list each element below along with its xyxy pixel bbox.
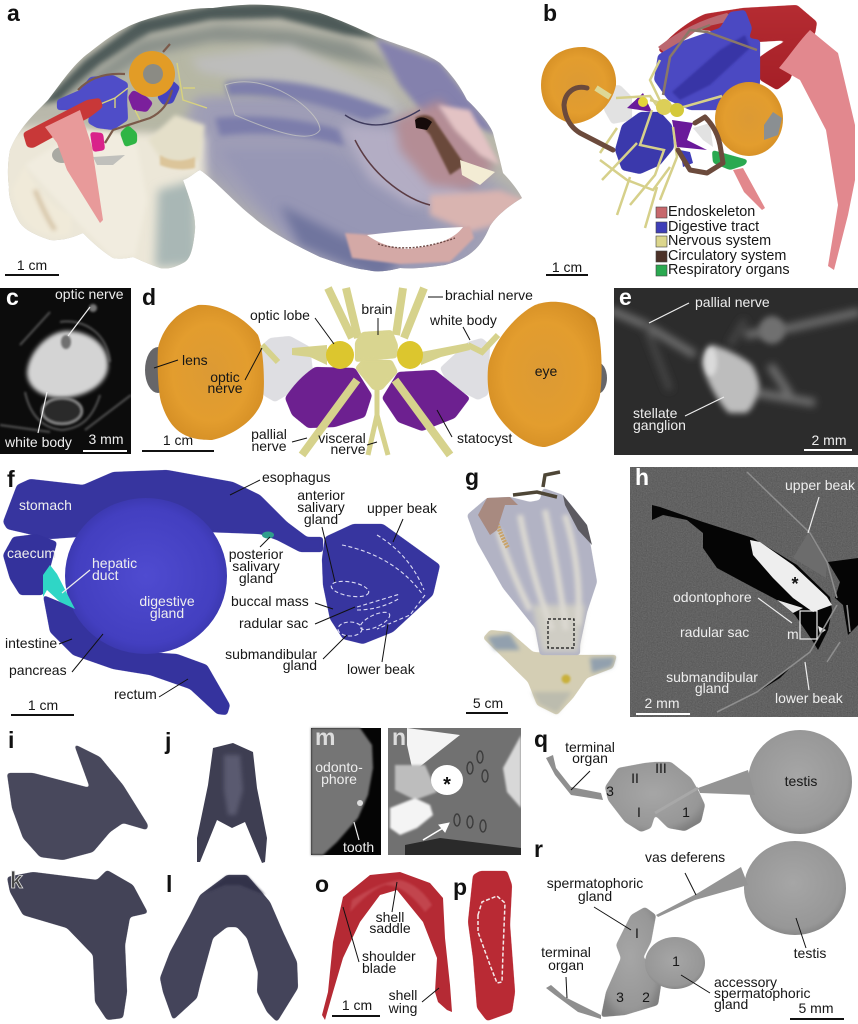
- panel label h: h: [635, 464, 649, 490]
- icon: eye: [129, 51, 175, 97]
- terminal organ: [546, 755, 603, 800]
- label spermatophoric gland: gland: [578, 888, 612, 904]
- right optic lobe: [397, 341, 423, 369]
- label shell saddle: [369, 882, 411, 936]
- asterisk n: *: [443, 774, 451, 796]
- respiratory organs: [712, 150, 748, 170]
- CT grain: [630, 467, 858, 717]
- legend: respiratory organs: Respiratory organs: [668, 262, 790, 278]
- label visceral nerve: [318, 430, 377, 457]
- scale d: [142, 432, 214, 451]
- numeral I: I: [635, 925, 639, 941]
- label upper beak: upper beak: [367, 500, 438, 516]
- label terminal organ: organ: [548, 957, 584, 973]
- label upper beak: [785, 477, 856, 533]
- black lower slit: [758, 668, 790, 692]
- scale c: [83, 431, 127, 451]
- arms lower cream: [532, 605, 585, 652]
- nerves and brain: [262, 288, 498, 455]
- label lower beak: lower beak: [347, 661, 416, 677]
- label spermatophoric gland: spermatophoric: [547, 875, 643, 891]
- label terminal organ: organ: [572, 750, 608, 766]
- label white body: white body: [429, 312, 497, 328]
- label accessory spermatophoric gland: accessory: [714, 974, 777, 990]
- scale h: [636, 695, 690, 714]
- tissue: [311, 728, 373, 855]
- label optic nerve: optic nerve: [55, 286, 124, 302]
- white labels: [7, 497, 195, 621]
- shell: [322, 872, 452, 1020]
- panel g: whole squid head photo: [465, 464, 617, 715]
- panel d: optic and brain anatomy: [142, 284, 607, 457]
- label lens: lens: [182, 352, 208, 368]
- label optic nerve: optic: [210, 369, 240, 385]
- label accessory spermatophoric gland: gland: [714, 996, 748, 1012]
- label shoulder blade: shoulder: [362, 948, 416, 964]
- white odontophore contents: [750, 540, 832, 612]
- label testis: testis: [794, 945, 826, 961]
- vas deferens: [655, 788, 698, 813]
- suboesophageal ganglion: [355, 360, 398, 390]
- circulatory vessels: [564, 87, 723, 173]
- label vas deferens: vas deferens: [645, 849, 725, 865]
- panel h: CT section of buccal mass: [630, 464, 858, 717]
- scale f: [11, 697, 74, 715]
- arm suckers: [495, 515, 508, 548]
- digestive tract overlay: [57, 75, 128, 130]
- panel b: 3D organ reconstruction: [541, 0, 855, 278]
- nerves overlay: [98, 63, 207, 120]
- soft tissue and nerves: [610, 310, 858, 403]
- label odontophore: phore: [321, 771, 357, 787]
- label optic nerve: [55, 286, 124, 336]
- labels d: [154, 287, 557, 457]
- panel label p: p: [453, 874, 467, 900]
- scale e: 2 mm: [812, 432, 846, 448]
- legend: nervous system: Nervous system: [668, 233, 771, 249]
- circulatory vessels upper: [663, 25, 757, 95]
- endoskeleton pink blade overlay: [45, 110, 103, 223]
- pink endoskeleton wing: [779, 30, 855, 270]
- panel k: lower beak side: [7, 867, 148, 1020]
- label anterior salivary gland: [297, 487, 345, 582]
- dashed outlines: beak and sacs: [330, 535, 425, 636]
- label rectum: [114, 679, 188, 702]
- panel label f: f: [7, 466, 15, 492]
- scale g: 5 cm: [473, 695, 503, 711]
- panel l: lower beak frontal: [160, 871, 298, 1022]
- upper nerve spot: [89, 304, 97, 312]
- bright ganglion patch: [705, 348, 717, 376]
- tissue lozenges: [454, 751, 488, 832]
- stomach and esophagus: [3, 470, 323, 552]
- scale o: 1 cm: [342, 997, 372, 1013]
- panel label j: j: [164, 728, 171, 754]
- panel label k: k: [10, 867, 23, 893]
- label terminal organ: [541, 944, 591, 998]
- label lens: [154, 352, 208, 368]
- panel label e: e: [619, 284, 632, 310]
- label posterior salivary gland: posterior: [229, 546, 284, 562]
- left optic tract: [292, 345, 327, 365]
- panel label b: b: [543, 0, 557, 26]
- white body left: [262, 336, 313, 402]
- panel r: male reproductive system second view: [534, 836, 846, 1019]
- label posterior salivary gland: gland: [239, 570, 273, 586]
- lens left: [145, 347, 171, 393]
- white second fragment: [777, 600, 826, 634]
- hepatic duct: [43, 565, 75, 609]
- legend: circulatory system: Circulatory system: [668, 248, 786, 264]
- label vas deferens: [645, 849, 725, 895]
- optic nerve spot: [61, 335, 71, 349]
- tentacle tips: [513, 472, 560, 497]
- label buccal mass: buccal mass: [231, 593, 309, 609]
- terminal organ: [546, 985, 601, 1019]
- label white body: [4, 392, 72, 450]
- panel label l: l: [166, 871, 172, 897]
- label statocyst: [437, 410, 512, 446]
- scale d: 1 cm: [163, 432, 193, 448]
- background: [388, 728, 521, 855]
- label shell wing: shell: [389, 987, 417, 1003]
- panel label o: o: [315, 871, 329, 897]
- label upper beak: [367, 500, 438, 542]
- label visceral nerve: visceral: [318, 430, 366, 446]
- label testis: testis: [785, 773, 817, 789]
- right lens: [764, 112, 782, 140]
- shell highlight: [350, 880, 432, 912]
- label radular sac: [239, 607, 355, 631]
- label optic nerve: [207, 348, 262, 396]
- label stellate ganglion: stellate: [633, 405, 678, 421]
- digestive gland: [65, 498, 227, 654]
- label odontophore: odonto-: [315, 759, 363, 775]
- label esophagus: esophagus: [262, 469, 331, 485]
- label visceral nerve: nerve: [330, 441, 366, 457]
- label submandibular gland: gland: [695, 680, 729, 696]
- numeral 3: 3: [616, 989, 624, 1005]
- label pancreas: pancreas: [9, 662, 67, 678]
- upper beak tissue: [793, 533, 827, 578]
- numeral III: III: [655, 760, 667, 776]
- label brachial nerve: brachial nerve: [445, 287, 533, 303]
- label m: m: [787, 626, 799, 642]
- label terminal organ: terminal: [541, 944, 591, 960]
- CT background: [630, 467, 858, 717]
- right white edge: [503, 735, 521, 808]
- CT background: [614, 288, 858, 455]
- panel label g: g: [465, 464, 479, 490]
- label hepatic duct: [62, 555, 137, 593]
- label tooth: tooth: [343, 839, 374, 855]
- label pancreas: [9, 634, 103, 678]
- numeral II: II: [631, 770, 639, 786]
- legend: endoskeleton: Endoskeleton: [668, 204, 755, 220]
- brain: [355, 330, 398, 362]
- left optic lobe: [326, 341, 354, 369]
- label stellate ganglion: ganglion: [633, 417, 686, 433]
- buccal mass: [322, 524, 440, 644]
- arms highlights: [498, 510, 579, 630]
- label stellate ganglion: [633, 397, 724, 433]
- label lower beak: lower beak: [775, 690, 844, 706]
- label pallial nerve: [649, 294, 770, 323]
- scale r: 5 mm: [798, 1000, 834, 1016]
- specimen body photograph: [0, 3, 525, 280]
- label white body: [429, 312, 497, 340]
- stellate ganglion: [702, 345, 759, 413]
- panel label r: r: [534, 836, 543, 862]
- panel a: squid specimen with overlaid organs: [0, 0, 525, 280]
- label terminal organ: [565, 739, 615, 790]
- label accessory spermatophoric gland: spermatophoric: [714, 985, 810, 1001]
- label odontophore: [673, 589, 792, 623]
- label upper beak: upper beak: [785, 477, 856, 493]
- upper beak line: [747, 472, 837, 598]
- label pallial nerve: nerve: [251, 438, 287, 454]
- legend: digestive tract: Digestive tract: [668, 219, 759, 235]
- panel e: stellate ganglion CT: [610, 284, 858, 455]
- statocyst spot: [562, 674, 570, 684]
- testis: [744, 841, 846, 935]
- label caecum: caecum: [7, 545, 56, 561]
- label pallial nerve: pallial: [251, 426, 287, 442]
- soft tissue knot: [759, 316, 785, 344]
- arms dark shading: [563, 495, 592, 545]
- panel label n: n: [392, 724, 406, 750]
- panel p: shell red ventral: [453, 871, 515, 1021]
- testis: [748, 730, 852, 834]
- statocyst left: [285, 367, 372, 428]
- label pallial nerve: pallial nerve: [695, 294, 770, 310]
- digestive tract upper: [654, 10, 760, 110]
- white body right: [693, 123, 713, 147]
- panel m: odontophore CT: [311, 724, 381, 855]
- panel label a: a: [7, 0, 20, 26]
- label posterior salivary gland: salivary: [232, 558, 280, 574]
- left eye: [158, 305, 264, 440]
- scale bar b: 1 cm: [552, 259, 582, 275]
- right eye: [488, 302, 602, 447]
- label anterior salivary gland: gland: [304, 511, 338, 527]
- pink small blade: [733, 168, 765, 210]
- label white body: white body: [4, 434, 72, 450]
- digestive lobe shading: [672, 35, 750, 100]
- label accessory spermatophoric gland: [681, 974, 810, 1012]
- numeral 2: 2: [642, 989, 650, 1005]
- panel i: upper beak side: [7, 727, 148, 860]
- label posterior salivary gland: [229, 537, 284, 586]
- label shoulder blade: blade: [362, 960, 396, 976]
- label testis: [794, 918, 826, 961]
- label shell wing: [388, 987, 439, 1016]
- label submandibular gland: submandibular: [666, 669, 758, 685]
- white star cavity: [431, 765, 463, 795]
- label submandibular gland: [666, 669, 758, 696]
- white body: [27, 331, 108, 398]
- endoskeleton overlay: [23, 98, 103, 148]
- fin blue shading: [487, 634, 615, 673]
- panel label c: c: [6, 284, 19, 310]
- asterisk h: *: [791, 574, 799, 594]
- label submandibular gland: [225, 635, 347, 673]
- circulatory vessels overlay: [78, 44, 172, 143]
- right optic tract: [421, 343, 470, 365]
- scale g: [466, 695, 508, 713]
- scale f: 1 cm: [28, 697, 58, 713]
- digestive small lower: [680, 150, 693, 167]
- second digestive lobe overlay: [157, 80, 180, 105]
- label shell saddle: shell: [376, 909, 404, 925]
- legend: [656, 204, 790, 278]
- spermatophoric gland and lower segments: [601, 907, 661, 1017]
- white lower left: [390, 798, 433, 835]
- panel j: upper beak frontal: [164, 728, 267, 863]
- pink stripe on saddle: [658, 13, 735, 54]
- panel label i: i: [8, 727, 14, 753]
- panel f: digestive system: [3, 466, 440, 715]
- fins and head base: [483, 630, 617, 715]
- spermatophoric complex: [605, 762, 705, 832]
- scale c: 3 mm: [88, 431, 124, 447]
- panel label q: q: [534, 726, 548, 752]
- label hepatic duct: hepatic: [92, 555, 137, 571]
- statocyst right: [382, 370, 470, 431]
- label digestive gland: digestive: [139, 593, 195, 609]
- panel label m: m: [315, 724, 335, 750]
- accessory gland: [645, 937, 705, 989]
- labels f: [5, 469, 438, 702]
- label lower beak: [347, 624, 416, 677]
- lower chamber: [42, 398, 82, 424]
- label intestine: intestine: [5, 635, 57, 651]
- right eye: [715, 82, 783, 156]
- midline shade: [224, 755, 243, 815]
- red shell saddle: [658, 5, 817, 90]
- mottled tissue: [395, 765, 437, 800]
- posterior salivary gland: [262, 532, 274, 538]
- respiratory overlay: [120, 125, 137, 147]
- black air cavity: [652, 505, 832, 650]
- scale bar a: [5, 257, 59, 275]
- panel q: male reproductive system: [534, 726, 852, 834]
- label digestive gland: [139, 593, 195, 621]
- numeral 3: 3: [606, 783, 614, 799]
- label radular sac: radular sac: [239, 615, 308, 631]
- label optic lobe: [250, 307, 334, 344]
- scale r: [790, 1000, 844, 1019]
- gray organs overlay: [52, 147, 125, 165]
- head lower shading: [532, 692, 572, 713]
- dashed box: [548, 619, 574, 648]
- label statocyst: statocyst: [457, 430, 512, 446]
- dark bottom band: [405, 838, 521, 855]
- numeral 1: 1: [682, 804, 690, 820]
- label esophagus: [230, 469, 331, 495]
- label shell saddle: saddle: [369, 920, 411, 936]
- tooth highlight: [357, 800, 363, 806]
- white body left: [604, 85, 632, 124]
- caecum: [3, 534, 57, 595]
- magenta overlay organ: [90, 132, 105, 152]
- label stomach: stomach: [19, 497, 72, 513]
- panel n: odontophore detail: [388, 724, 521, 855]
- statocyst purple: [627, 93, 707, 150]
- scale o: [332, 997, 380, 1016]
- black background: [311, 728, 381, 855]
- white upper region: [407, 728, 460, 766]
- label eye: eye: [535, 363, 557, 379]
- label brain: brain: [361, 301, 393, 317]
- panel o: shell red frontal: [315, 871, 452, 1020]
- scale e: [804, 432, 852, 450]
- label optic lobe: optic lobe: [250, 307, 310, 323]
- label pallial nerve: [251, 426, 307, 454]
- panel label d: d: [142, 284, 156, 310]
- intestine and rectum: [43, 595, 230, 715]
- label brain: [361, 301, 393, 335]
- arm tips pink: [478, 497, 518, 535]
- brain and nervous system: [600, 60, 722, 228]
- digestive lower: [615, 112, 674, 174]
- numeral 1: 1: [672, 953, 680, 969]
- arms fan: [467, 488, 597, 655]
- label shoulder blade: [343, 907, 416, 976]
- label odontophore: [315, 759, 363, 787]
- left eye: [541, 47, 616, 124]
- scale bar a: 1 cm: [17, 257, 47, 273]
- top shade: [205, 876, 265, 895]
- inset box m: [800, 611, 817, 639]
- numeral I: I: [637, 804, 641, 820]
- scale h: 2 mm: [644, 695, 680, 711]
- vas deferens: [656, 867, 748, 917]
- label optic nerve: nerve: [207, 380, 243, 396]
- capsule rim and vessels: [0, 312, 131, 432]
- white body right: [440, 338, 490, 400]
- testis neck: [698, 770, 755, 795]
- label spermatophoric gland: [547, 875, 643, 930]
- label hepatic duct: duct: [92, 567, 119, 583]
- panel c: CT white body: [0, 284, 131, 454]
- white arrow: [423, 823, 449, 840]
- label submandibular gland: submandibular: [225, 646, 317, 662]
- label rectum: rectum: [114, 686, 157, 702]
- label lower beak: [775, 662, 844, 706]
- optic nerve stub: [596, 88, 610, 97]
- statocyst overlay: [128, 90, 153, 112]
- label radular sac: radular sac: [680, 624, 749, 640]
- label submandibular gland: gland: [283, 657, 317, 673]
- dashed outline: [478, 896, 505, 983]
- label anterior salivary gland: anterior: [297, 487, 345, 503]
- label digestive gland: gland: [150, 605, 184, 621]
- label odontophore: odontophore: [673, 589, 752, 605]
- label terminal organ: terminal: [565, 739, 615, 755]
- label anterior salivary gland: salivary: [297, 499, 345, 515]
- black right cavity: [828, 558, 858, 635]
- label shell wing: wing: [388, 1000, 417, 1016]
- CT background: [0, 288, 131, 454]
- lens right: [587, 362, 607, 394]
- lower beak line: [717, 605, 850, 712]
